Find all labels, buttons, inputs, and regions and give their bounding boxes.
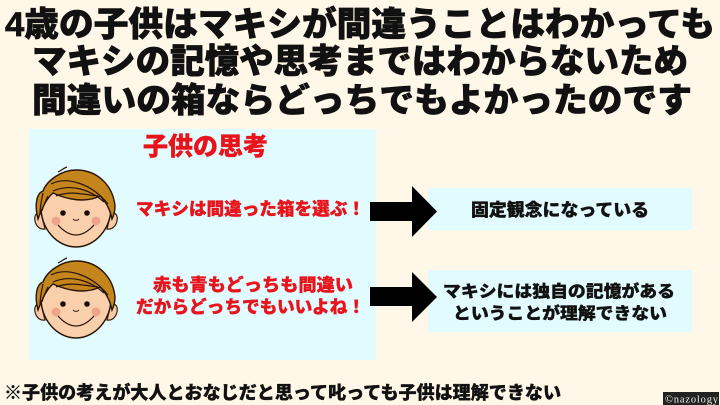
icon: boy face 1 (35, 167, 117, 247)
footnote: ※子供の考えが大人とおなじだと思って叱っても子供は理解できない (4, 382, 561, 403)
arrow 2 (370, 272, 437, 322)
title (5, 5, 715, 120)
panel: child's thinking (29, 129, 376, 360)
text: result 2: ということが理解できない (453, 303, 667, 323)
panel: result 1 (428, 188, 692, 230)
text: child thought 2 (136, 275, 365, 317)
title: マキシの記憶や思考まではわからないため (32, 43, 688, 81)
text: result 1: 固定観念になっている (471, 199, 649, 220)
text: child thought 2: 赤も青もどっちも間違い (153, 275, 353, 295)
panel: result 2 (428, 270, 692, 332)
text: result 2: マキシには独自の記憶がある (443, 281, 675, 301)
heading: child's thinking: 子供の思考 (143, 133, 268, 161)
title: 4歳の子供はマキシが間違うことはわかっても (5, 5, 715, 44)
text: child thought 1: マキシは間違った箱を選ぶ！ (136, 199, 365, 219)
text: result 2 (443, 281, 675, 323)
title: 間違いの箱ならどっちでもよかったのです (32, 82, 692, 120)
arrow 1 (370, 186, 437, 237)
text: child thought 2: だからどっちでもいいよね！ (136, 297, 365, 317)
icon: boy face 2 (35, 258, 117, 338)
